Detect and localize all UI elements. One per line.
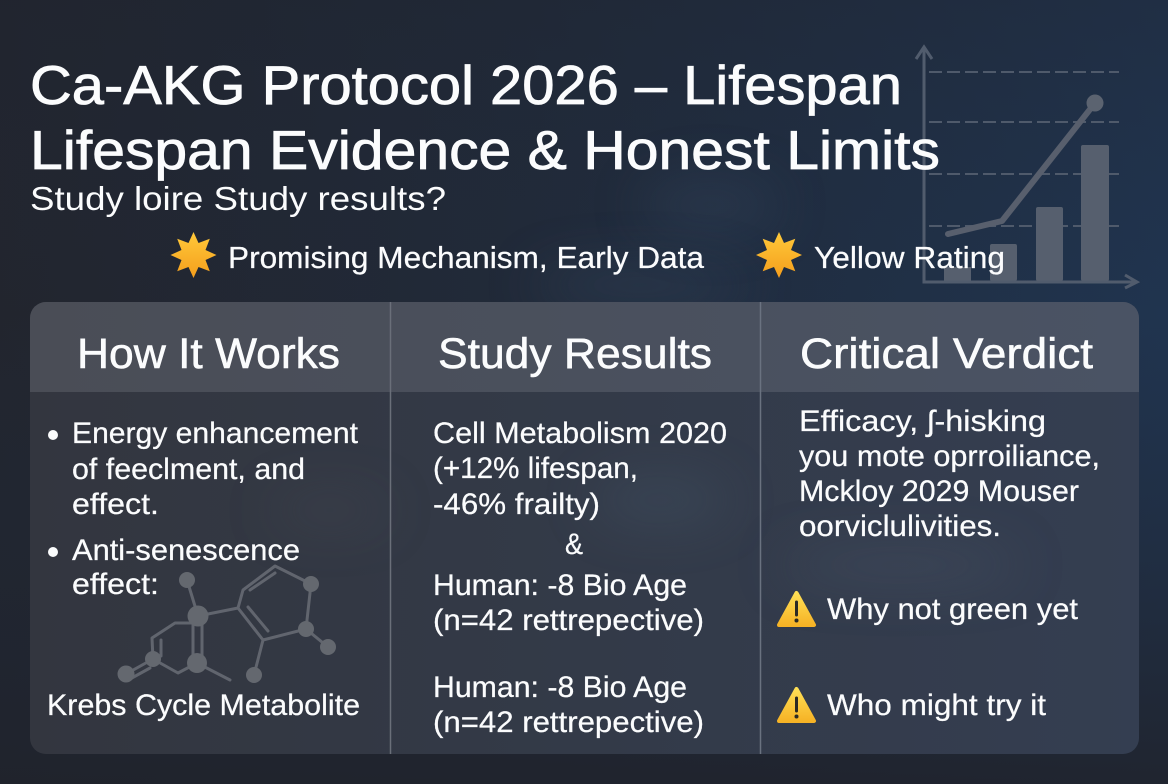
callout: who might try it: Who might try it bbox=[827, 689, 1047, 722]
heading: study results: Study Results bbox=[438, 330, 712, 378]
heading: critical verdict: Critical Verdict bbox=[800, 330, 1093, 378]
study: cell metabolism: Cell Metabolism 2020 bbox=[433, 417, 727, 450]
bullet: anti-senescence: effect: bbox=[72, 568, 159, 601]
bullet: energy enhancement: effect. bbox=[72, 488, 159, 521]
verdict text: you mote oprroiliance, bbox=[799, 440, 1100, 473]
caption: krebs cycle metabolite: Krebs Cycle Metabolite bbox=[47, 689, 360, 722]
study: human retrospective: Human: -8 Bio Age bbox=[433, 569, 687, 602]
rating badge: yellow rating bbox=[756, 232, 1005, 278]
verdict text: Mckloy 2029 Mouser bbox=[799, 475, 1079, 508]
callout: why not green yet: Why not green yet bbox=[827, 593, 1079, 626]
study: human retrospective repeat bbox=[433, 671, 704, 739]
heading: how it works: How It Works bbox=[77, 330, 340, 378]
study: cell metabolism: -46% frailty) bbox=[433, 488, 600, 521]
panel header band bbox=[30, 302, 1139, 392]
study: cell metabolism: (+12% lifespan, bbox=[433, 452, 638, 485]
icon: warning triangle bbox=[779, 689, 814, 721]
bullet: anti-senescence: Anti-senescence bbox=[72, 534, 300, 567]
title: Ca-AKG Protocol 2026 – Lifespan bbox=[30, 54, 902, 116]
column: how it works bbox=[47, 330, 360, 722]
study: cell metabolism bbox=[433, 417, 727, 521]
verdict text: oorviclulivities. bbox=[799, 510, 1001, 543]
study: human retrospective repeat: Human: -8 Bio Age bbox=[433, 671, 687, 704]
bullet: anti-senescence bbox=[48, 534, 300, 601]
chart illustration: rising bars and trend line bbox=[916, 47, 1137, 288]
verdict text: Efficacy, ʃ-hisking bbox=[799, 405, 1046, 438]
study: human retrospective repeat: (n=42 rettrepective) bbox=[433, 706, 704, 739]
column: study results bbox=[433, 330, 727, 739]
column: critical verdict bbox=[779, 330, 1100, 722]
study: human retrospective: (n=42 rettrepective) bbox=[433, 604, 704, 637]
rating badge: yellow rating: Yellow Rating bbox=[814, 240, 1005, 275]
bullet: energy enhancement bbox=[48, 417, 359, 521]
icon: star bbox=[170, 232, 216, 278]
icon: warning triangle bbox=[779, 593, 814, 625]
subtitle: Study loire Study results? bbox=[30, 180, 446, 217]
chart axes bbox=[916, 47, 1137, 288]
chart trend line bbox=[948, 94, 1104, 234]
title bbox=[30, 54, 940, 181]
icon: star bbox=[756, 232, 802, 278]
verdict text bbox=[799, 405, 1100, 543]
title: Lifespan Evidence & Honest Limits bbox=[30, 119, 940, 181]
bullet: energy enhancement: Energy enhancement bbox=[72, 417, 359, 450]
panel: three-column comparison bbox=[30, 302, 1139, 754]
panel background bbox=[30, 302, 1139, 754]
study: human retrospective bbox=[433, 569, 704, 637]
molecule illustration bbox=[118, 566, 336, 683]
chart bars bbox=[944, 145, 1109, 281]
bullet: energy enhancement: of feeclment, and bbox=[72, 453, 305, 486]
rating badge: promising mechanism bbox=[170, 232, 705, 278]
chart grid lines bbox=[929, 72, 1119, 226]
ampersand: & bbox=[565, 528, 583, 561]
rating badge: promising mechanism: Promising Mechanism, Early Data bbox=[228, 240, 705, 275]
